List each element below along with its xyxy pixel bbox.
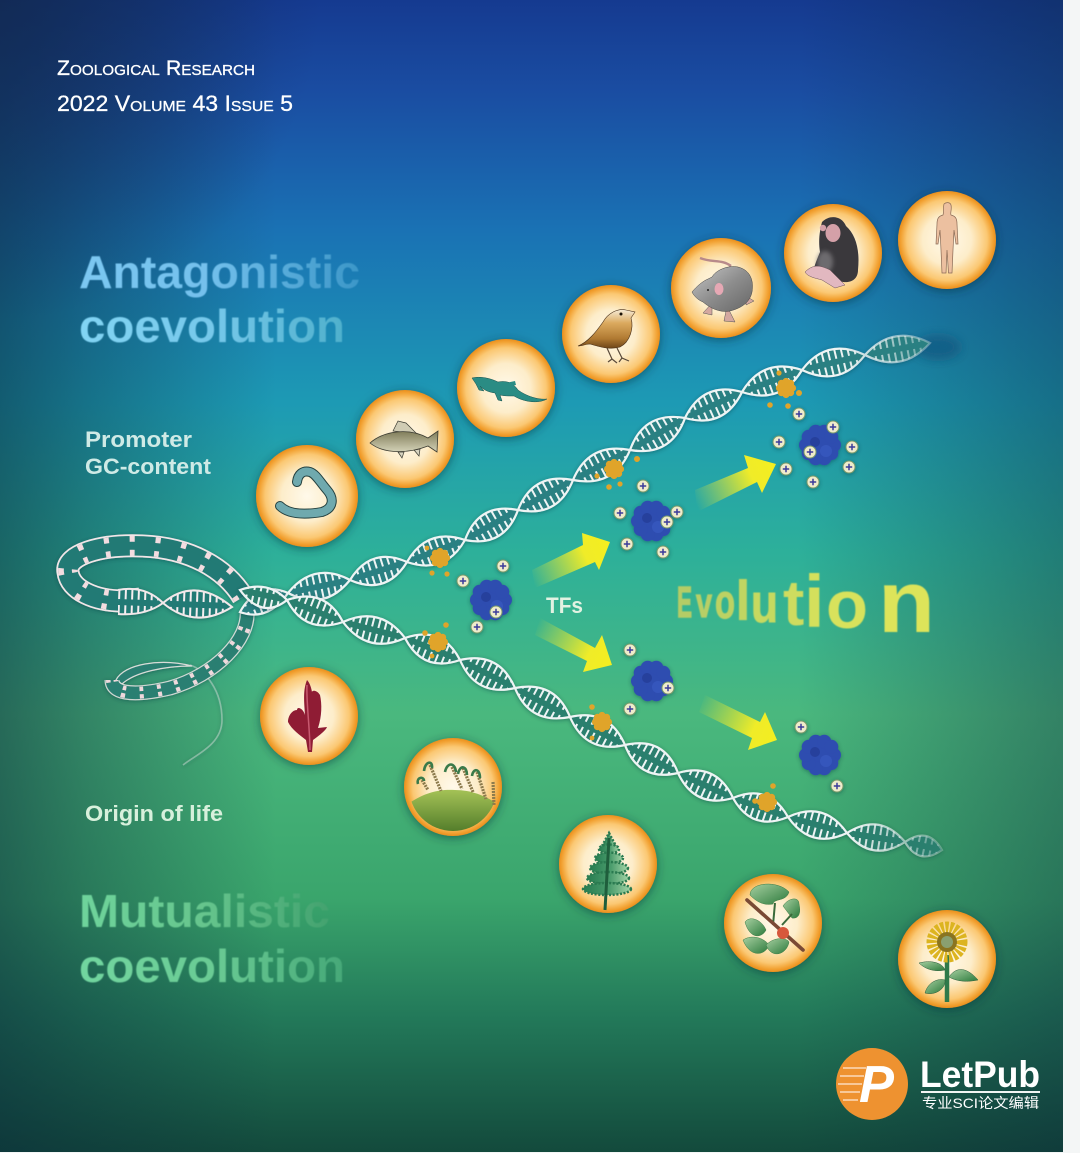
- label: promoter GC-content: GC-content: [85, 454, 212, 479]
- TF cluster: upper right: [773, 408, 858, 488]
- heading: mutualistic coevolution: coevolution: [79, 940, 345, 992]
- arrow: lower right: [699, 695, 777, 750]
- DNA helix: lower branch: [240, 587, 942, 856]
- logo mark: [836, 1048, 908, 1120]
- heading: mutualistic coevolution: [79, 885, 345, 992]
- logo mark: P: [859, 1056, 894, 1114]
- heading: antagonistic coevolution: [79, 246, 360, 352]
- transcription factors (blue): [457, 408, 858, 792]
- label: promoter GC-content: [85, 427, 212, 479]
- label: origin of life: Origin of life: [85, 801, 223, 826]
- journal title: Zoological Research: [57, 57, 255, 80]
- label: promoter GC-content: Promoter: [85, 427, 192, 452]
- TF cluster: upper middle: [614, 480, 683, 558]
- logo wordmark: LetPub: [920, 1054, 1040, 1095]
- logo subtitle: 专业SCI论文编辑: [922, 1095, 1039, 1111]
- icon: sunflower: [898, 910, 996, 1008]
- icon: fern: [559, 815, 657, 913]
- heading: antagonistic coevolution: Antagonistic: [79, 246, 360, 298]
- label: TFs: TFs: [546, 593, 583, 618]
- TF cluster: lower right: [795, 721, 843, 792]
- heading: evolution: u: [751, 572, 778, 634]
- icon: ginkgo: [724, 874, 822, 972]
- icon: moss: [404, 738, 502, 840]
- icon: rat: [671, 238, 771, 338]
- icon: human: [898, 191, 996, 289]
- heading: evolution: [677, 552, 935, 651]
- heading: evolution: t: [783, 567, 804, 639]
- TF cluster: lower middle: [624, 644, 674, 715]
- arrow: lower left: [535, 618, 612, 672]
- arrow: upper left: [532, 533, 610, 588]
- journal title: [57, 57, 293, 116]
- icon: red seaweed: [260, 667, 358, 765]
- arrows: [532, 455, 777, 750]
- heading: evolution: o: [715, 576, 735, 629]
- icon: worm: [256, 445, 358, 547]
- icon: chimpanzee: [784, 204, 882, 302]
- icon: fish: [356, 390, 454, 488]
- logo: LetPub: [836, 1048, 1040, 1120]
- journal title: 2022 Volume 43 Issue 5: [57, 91, 293, 116]
- heading: evolution: n: [878, 552, 935, 651]
- icon: lizard: [457, 339, 555, 437]
- heading: evolution: i: [804, 560, 825, 643]
- heading: evolution: l: [735, 569, 751, 633]
- arrow: upper right: [695, 455, 776, 512]
- heading: mutualistic coevolution: Mutualistic: [79, 885, 330, 937]
- chromatin ribbon and loops: [68, 546, 247, 765]
- promoter proteins (gold): [422, 370, 802, 812]
- DNA helix: upper branch: [240, 336, 960, 615]
- heading: evolution: E: [677, 578, 692, 627]
- icon: bird: [562, 285, 660, 383]
- TF cluster: centre: [457, 560, 512, 633]
- heading: evolution: v: [696, 579, 712, 626]
- heading: antagonistic coevolution: coevolution: [79, 300, 345, 352]
- heading: evolution: o: [826, 567, 868, 643]
